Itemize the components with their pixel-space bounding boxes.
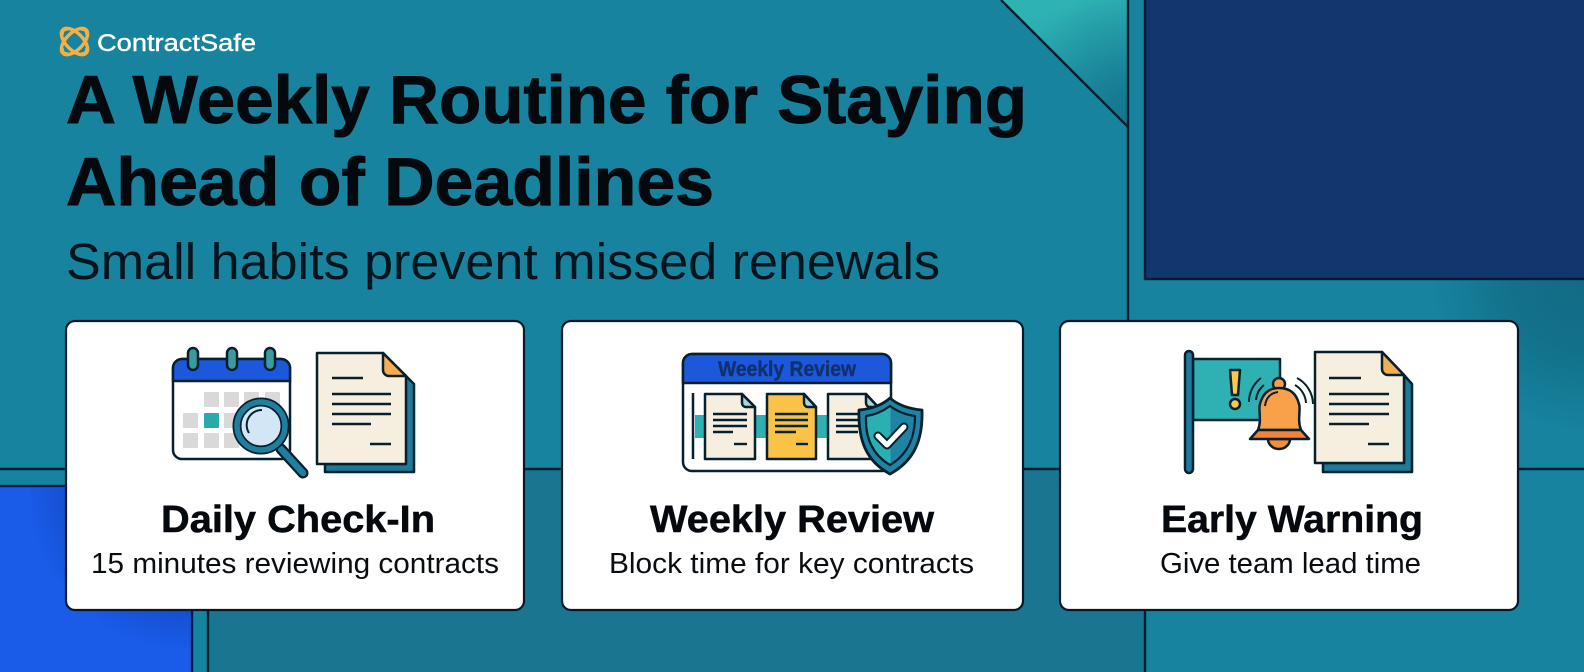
panel: Daily Check-In <box>66 321 524 610</box>
panel: Early Warning <box>1060 321 1518 610</box>
background panel: speckled right shade <box>1430 280 1584 430</box>
board header label: Weekly Review <box>718 358 857 381</box>
icon: shield with check <box>859 398 922 474</box>
title: Ahead of Deadlines <box>66 144 714 220</box>
title: A Weekly Routine for Staying <box>66 62 1027 138</box>
icon: warning flag <box>1185 351 1280 473</box>
panel: Weekly Review <box>562 321 1023 610</box>
background panel: navy block <box>1145 0 1584 279</box>
card description: Give team lead time <box>1160 548 1421 580</box>
title <box>66 62 1027 220</box>
background panel: blue block <box>0 486 192 672</box>
subtitle: Small habits prevent missed renewals <box>66 233 940 290</box>
logo wordmark: ContractSafe <box>97 30 256 57</box>
icon: calendar with magnifier <box>173 348 303 473</box>
logo <box>57 24 256 59</box>
background panel: teal corner triangle <box>1001 0 1128 127</box>
icon: review board with documents <box>683 354 922 474</box>
card heading: Weekly Review <box>650 499 934 541</box>
icon: logo mark <box>57 24 92 59</box>
card description: Block time for key contracts <box>609 548 974 580</box>
icon: document stack <box>1315 352 1412 472</box>
background panel: darker lower band <box>208 469 1145 672</box>
card description: 15 minutes reviewing contracts <box>91 548 499 580</box>
card heading: Early Warning <box>1161 499 1423 541</box>
card heading: Daily Check-In <box>161 499 435 541</box>
icon: alarm bell <box>1249 378 1313 449</box>
icon: document stack <box>317 353 414 472</box>
